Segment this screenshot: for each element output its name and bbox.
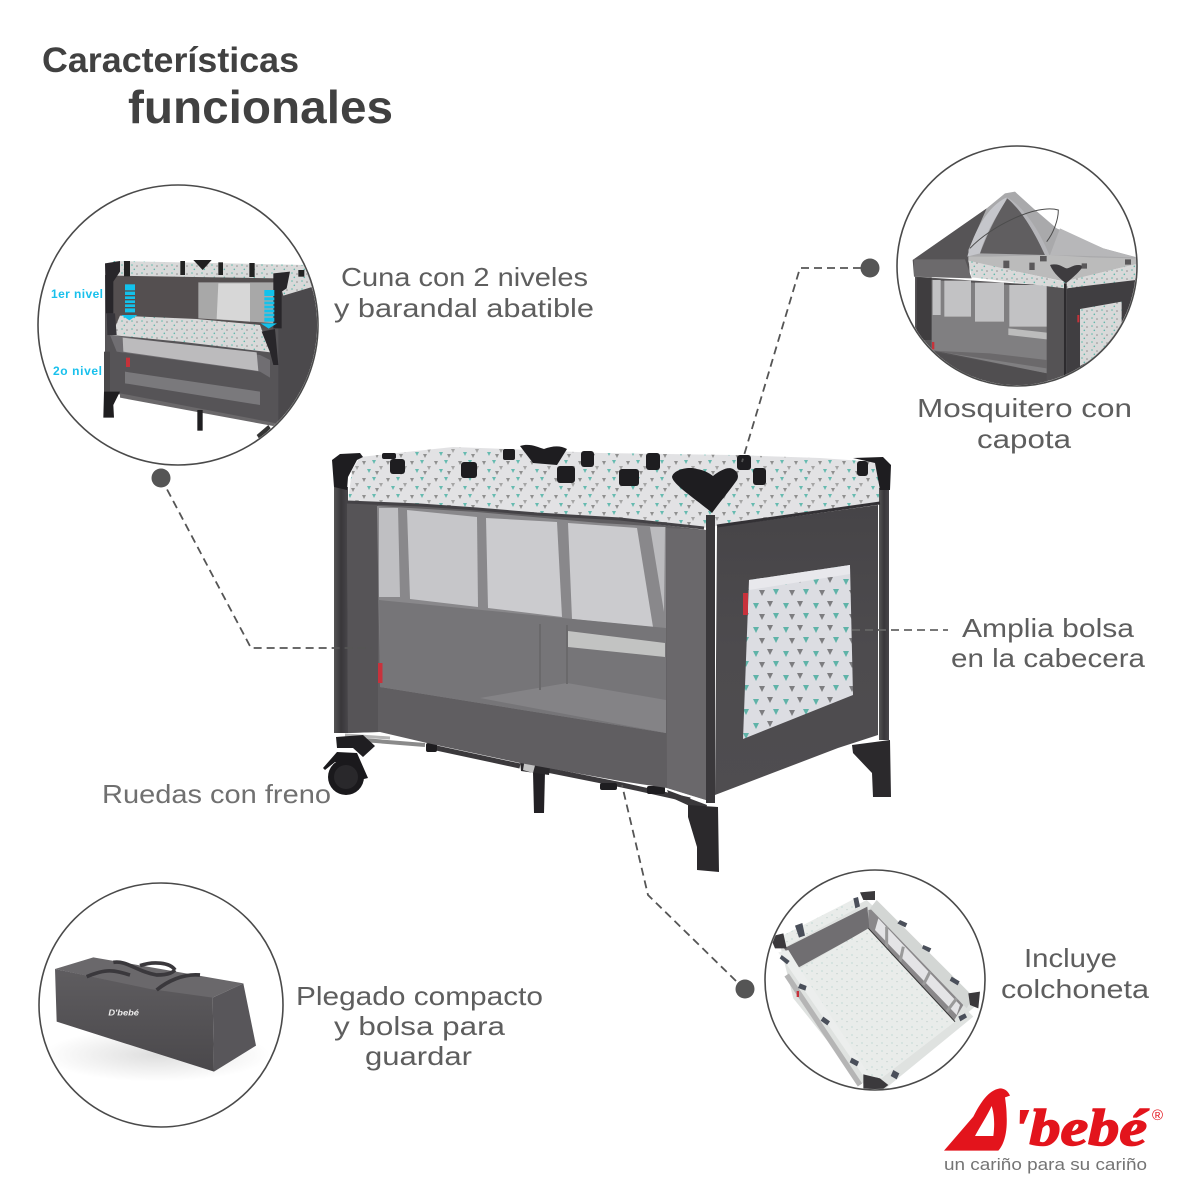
icon: storage bag: D'bebé <box>108 1009 140 1018</box>
text: ruedas con freno: Ruedas con freno <box>102 779 331 809</box>
right post <box>879 488 889 740</box>
label: 1er nivel: 1er nivel <box>51 287 103 301</box>
marker dot: niveles <box>152 468 170 488</box>
panel: mosquitero photo circle <box>897 146 1137 393</box>
text: cuna con 2 niveles: y barandal abatible <box>334 293 594 323</box>
text: incluye colchoneta: colchoneta <box>1001 974 1150 1004</box>
registered mark: ® <box>1152 1107 1163 1124</box>
title: funcionales <box>128 81 393 133</box>
front panel <box>347 503 706 800</box>
title <box>42 41 393 133</box>
tagline: un cariño para su cariño <box>944 1155 1147 1174</box>
circle outline <box>39 883 283 1127</box>
text: amplia bolsa en la cabecera <box>951 613 1146 673</box>
text: cuna con 2 niveles: Cuna con 2 niveles <box>341 262 588 292</box>
icon: crib two levels <box>103 260 323 440</box>
text: incluye colchoneta <box>1001 943 1150 1004</box>
marker dot: mosquitero <box>860 258 880 278</box>
text: plegado compacto <box>296 981 543 1071</box>
frame and legs <box>345 735 891 872</box>
zip line front <box>347 502 704 528</box>
text: cuna con 2 niveles <box>334 262 594 323</box>
panel: bag photo circle <box>39 883 283 1127</box>
text: plegado compacto: y bolsa para <box>334 1011 506 1041</box>
text: mosquitero con capota: Mosquitero con <box>917 393 1132 423</box>
logo wordmark: 'bebé <box>1012 1100 1149 1157</box>
back inner band and top rail fabric <box>348 447 880 528</box>
clips and corner caps <box>332 445 891 513</box>
left panel strip <box>347 503 378 733</box>
logo: D'bebé <box>944 1088 1163 1174</box>
icon: crib with canopy <box>913 192 1137 393</box>
logo bird <box>944 1088 1010 1151</box>
text: plegado compacto: Plegado compacto <box>296 981 543 1011</box>
red tag front <box>378 663 382 683</box>
zip line right <box>717 503 880 526</box>
text: amplia bolsa en la cabecera: en la cabecera <box>951 643 1146 673</box>
left post <box>334 487 348 733</box>
circle outline <box>897 146 1137 386</box>
corner post <box>706 515 715 803</box>
text: incluye colchoneta: Incluye <box>1024 943 1117 973</box>
icon: storage bag <box>55 957 256 1075</box>
panel: niveles photo circle <box>38 185 323 465</box>
dashed connector: bolsa <box>852 629 948 631</box>
illustration: main travel crib <box>323 445 891 872</box>
text: mosquitero con capota <box>917 393 1132 454</box>
dashed connector: colchoneta <box>622 785 736 981</box>
circle outline <box>38 185 318 465</box>
panel: mattress photo circle <box>765 870 985 1095</box>
label: 2o nivel: 2o nivel <box>53 364 102 378</box>
right panel <box>715 505 878 795</box>
title: Características <box>42 41 299 80</box>
icon: crib from above with mattress <box>770 891 980 1095</box>
text: mosquitero con capota: capota <box>977 424 1072 454</box>
text: plegado compacto: guardar <box>365 1041 472 1071</box>
marker dot: colchoneta <box>736 980 754 998</box>
side pocket <box>743 565 853 739</box>
dashed connector: mosquitero <box>742 268 861 462</box>
dashed connector: niveles <box>161 478 372 648</box>
mesh window <box>377 506 666 733</box>
circle outline <box>765 870 985 1090</box>
text: amplia bolsa en la cabecera: Amplia bolsa <box>962 613 1135 643</box>
wheel <box>323 735 375 795</box>
front right lighter strip <box>666 528 706 800</box>
